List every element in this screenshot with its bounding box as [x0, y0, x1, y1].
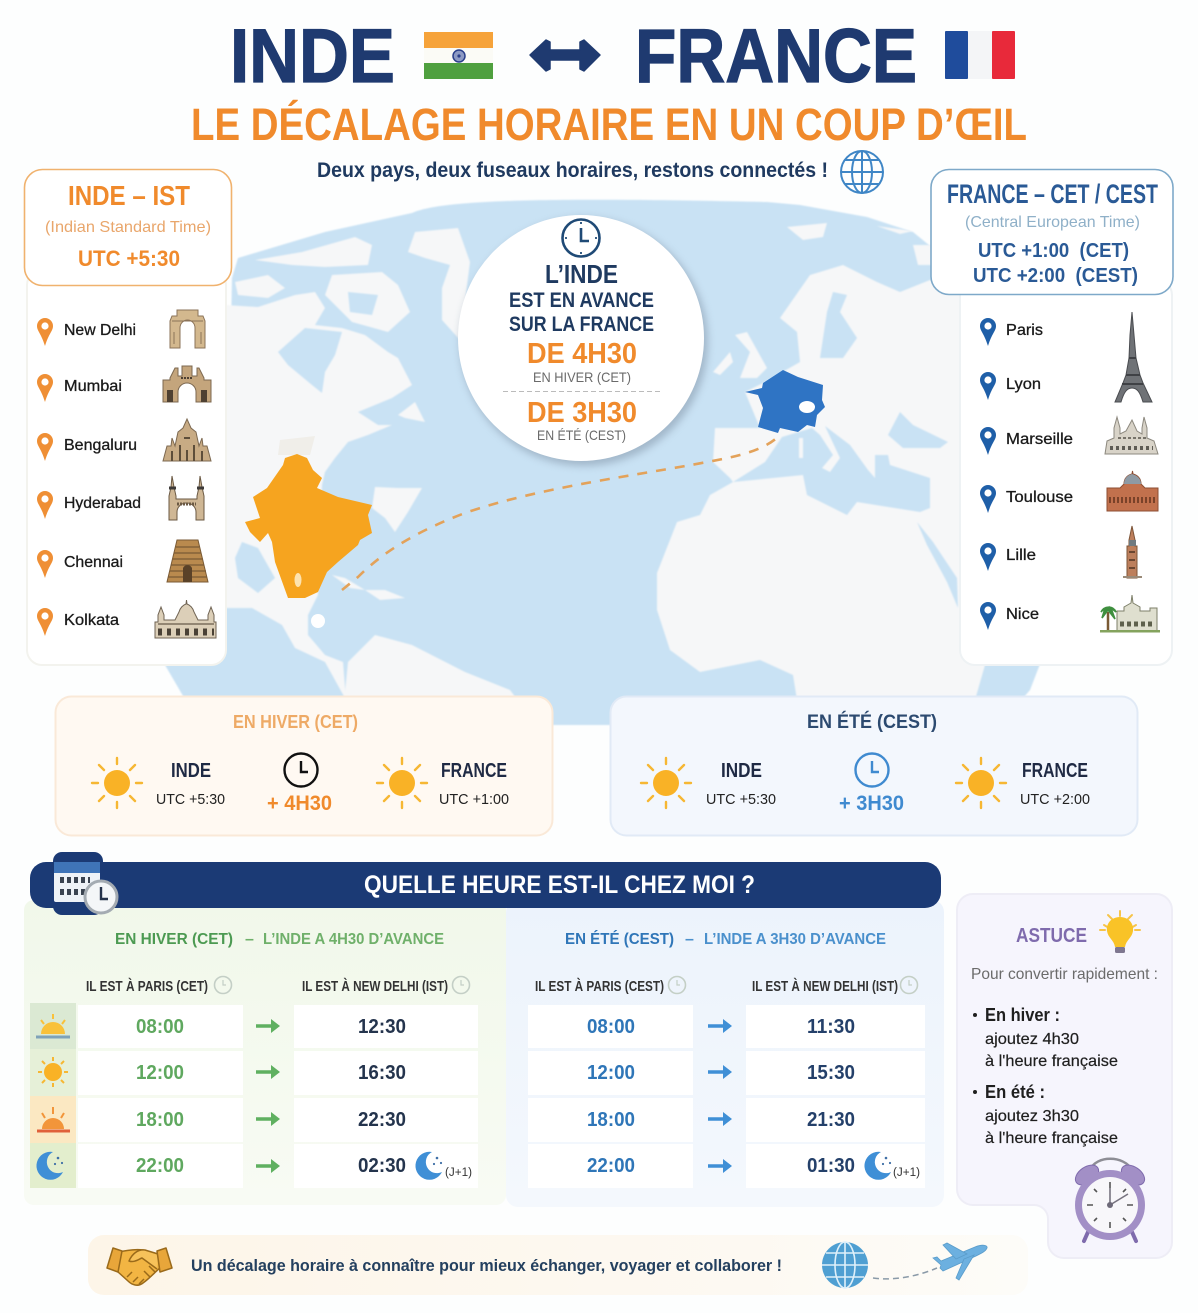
- icon: clock: [284, 754, 318, 786]
- subtitle: LE DÉCALAGE HORAIRE EN UN COUP D’ŒIL: [191, 99, 1027, 150]
- summer heading: EN ÉTÉ (CEST): [565, 929, 674, 948]
- France UTC: FRANCE: [441, 760, 507, 782]
- icon: Chennai temple: [167, 540, 208, 582]
- summer heading: [565, 929, 886, 948]
- icon: Bengaluru palace: [163, 419, 211, 461]
- icon: Eiffel Tower: [1115, 312, 1152, 402]
- India highlighted on map: [245, 454, 372, 598]
- summer heading: –: [685, 931, 694, 948]
- city: Lyon: [980, 372, 1041, 400]
- icon: Victoria Memorial: [155, 600, 216, 638]
- city: Chennai: Chennai: [64, 554, 123, 571]
- panel: summer summary: [610, 696, 1138, 836]
- row: 12:00 to 16:30: 16:30: [358, 1062, 406, 1084]
- summer heading: L’INDE A 3H30 D’AVANCE: [704, 931, 886, 948]
- icon: globe: [841, 151, 883, 193]
- table background: summer: [506, 900, 944, 1207]
- city: Nice: [980, 602, 1039, 630]
- row: 22:00 to 01:30: 22:00: [587, 1155, 635, 1177]
- footer strip: [88, 1235, 1028, 1295]
- city: Lille: [980, 543, 1036, 571]
- row: 12:00 to 15:30: 12:00: [587, 1062, 635, 1084]
- icon: Lille belfry: [1123, 526, 1142, 578]
- city: Paris: [980, 318, 1043, 346]
- France header: (Central European Time): [965, 214, 1140, 231]
- icon: light bulb: [1100, 911, 1140, 953]
- row: 22:00 to 02:30: (J+1): [445, 1167, 472, 1179]
- icon: Charminar: [169, 476, 204, 520]
- city: Mumbai: [37, 374, 122, 402]
- city: Toulouse: [980, 485, 1073, 513]
- banner: QUELLE HEURE EST-IL CHEZ MOI ?: [364, 871, 755, 899]
- row: 08:00 to 12:30: 08:00: [136, 1016, 184, 1038]
- icon: Nice palace with palm: [1100, 595, 1160, 632]
- city: Lille: Lille: [1006, 547, 1036, 564]
- row: 22:00 to 01:30: (J+1): [893, 1167, 920, 1179]
- row: 12:00 to 16:30: [78, 1051, 478, 1095]
- icon: alarm clock: [1072, 1159, 1148, 1241]
- icon: globe: [822, 1242, 868, 1288]
- city: New Delhi: New Delhi: [64, 322, 136, 339]
- tip: winter: En hiver :: [985, 1005, 1060, 1025]
- row: 18:00 to 22:30: [78, 1098, 478, 1142]
- icon: Indian flag: [424, 32, 493, 79]
- city: Bengaluru: Bengaluru: [64, 437, 137, 454]
- dashed flight path: [873, 1268, 937, 1279]
- city: Hyderabad: Hyderabad: [64, 495, 141, 512]
- column head: Paris: IL EST À PARIS (CET): [86, 978, 208, 995]
- winter difference: DE 4H30: [527, 338, 637, 370]
- tip title: ASTUCE: [1016, 925, 1087, 947]
- India UTC: [706, 760, 776, 808]
- panel: winter summary: EN HIVER (CET): [233, 712, 358, 732]
- time-of-day cells: [30, 1003, 76, 1188]
- row: 22:00 to 02:30: 02:30: [358, 1155, 406, 1177]
- icon: clock: [856, 754, 888, 786]
- tip: winter: ajoutez 4h30: [985, 1031, 1079, 1048]
- tip: summer: [973, 1082, 1118, 1147]
- row: 18:00 to 21:30: [528, 1098, 925, 1142]
- panel: winter table: [30, 931, 478, 1188]
- winter heading: [115, 931, 444, 948]
- row: 18:00 to 22:30: 18:00: [136, 1109, 184, 1131]
- icon: sun: [956, 758, 1006, 808]
- India UTC: [156, 760, 225, 808]
- column head: New Delhi: IL EST À NEW DELHI (IST): [752, 978, 898, 995]
- row: 08:00 to 12:30: [78, 1005, 478, 1048]
- France UTC: FRANCE: [1022, 760, 1088, 782]
- white marker: [311, 614, 325, 628]
- row: 18:00 to 21:30: 21:30: [807, 1109, 855, 1131]
- tip: summer: En été :: [985, 1082, 1045, 1102]
- city: Hyderabad: [37, 491, 141, 519]
- row: 22:00 to 01:30: [528, 1144, 925, 1188]
- panel: France cities: [931, 170, 1173, 665]
- Hudson Bay: [278, 328, 342, 393]
- France header: UTC +2:00 (CEST): [973, 265, 1138, 287]
- city: New Delhi: [37, 318, 136, 346]
- title: FRANCE: FRANCE: [635, 14, 917, 99]
- India UTC: UTC +5:30: [156, 791, 225, 808]
- icon: calendar with clock: [53, 852, 117, 915]
- tip: winter: à l'heure française: [985, 1053, 1118, 1070]
- India UTC: INDE: [721, 760, 762, 782]
- icon: Capitole de Toulouse: [1107, 471, 1158, 511]
- tip intro: Pour convertir rapidement :: [971, 966, 1158, 983]
- icon: Gateway of India: [163, 366, 211, 402]
- city: Lyon: Lyon: [1006, 376, 1041, 393]
- panel: tip: [957, 894, 1172, 1258]
- city: Bengaluru: [37, 433, 137, 461]
- row: 18:00 to 21:30: 18:00: [587, 1109, 635, 1131]
- winter heading: L’INDE A 4H30 D’AVANCE: [263, 931, 444, 948]
- India header: UTC +5:30: [78, 246, 180, 271]
- row: 08:00 to 11:30: 11:30: [807, 1016, 855, 1038]
- city: Kolkata: [37, 608, 119, 636]
- title: INDE: INDE: [230, 14, 395, 99]
- banner: [30, 852, 941, 915]
- India header: (Indian Standard Time): [45, 219, 211, 236]
- footer text: Un décalage horaire à connaître pour mieux échanger, voyager et collaborer !: [191, 1256, 782, 1275]
- city: Mumbai: Mumbai: [64, 378, 122, 395]
- panel: India cities: [24, 170, 232, 665]
- row: 12:00 to 16:30: 12:00: [136, 1062, 184, 1084]
- callout text: SUR LA FRANCE: [509, 313, 654, 336]
- row: 22:00 to 02:30: [78, 1144, 478, 1188]
- city: Nice: Nice: [1006, 606, 1039, 623]
- France UTC: [1020, 760, 1090, 808]
- icon: plane: [933, 1243, 987, 1280]
- row: 12:00 to 15:30: [528, 1051, 925, 1095]
- icon: handshake: [107, 1248, 172, 1285]
- city: Kolkata: Kolkata: [64, 612, 119, 629]
- icon: French flag: [945, 31, 1015, 79]
- callout text: EST EN AVANCE: [509, 289, 654, 312]
- city: Marseille: Marseille: [1006, 431, 1073, 448]
- row: 08:00 to 11:30: 08:00: [587, 1016, 635, 1038]
- row: 22:00 to 01:30: 01:30: [807, 1155, 855, 1177]
- city: Paris: Paris: [1006, 322, 1043, 339]
- row: 22:00 to 02:30: 22:00: [136, 1155, 184, 1177]
- France header: [931, 170, 1173, 294]
- tip: winter: [973, 1005, 1118, 1070]
- panel: summer table: [528, 929, 925, 1188]
- France header: UTC +1:00 (CET): [978, 240, 1129, 262]
- panel: summer summary: EN ÉTÉ (CEST): [807, 711, 937, 733]
- France UTC: UTC +2:00: [1020, 791, 1090, 808]
- winter heading: EN HIVER (CET): [115, 931, 233, 948]
- row: 08:00 to 12:30: 12:30: [358, 1016, 406, 1038]
- summer difference: DE 3H30: [527, 397, 637, 429]
- tip: summer: ajoutez 3h30: [985, 1108, 1079, 1125]
- summer difference: EN ÉTÉ (CEST): [537, 427, 626, 443]
- India UTC: INDE: [171, 760, 211, 782]
- summer gap: + 3H30: [839, 792, 904, 815]
- dashed route India to France: [342, 435, 780, 590]
- tip: summer: à l'heure française: [985, 1130, 1118, 1147]
- icon: Notre-Dame de la Garde: [1105, 417, 1158, 454]
- table background: winter: [24, 900, 506, 1205]
- icon: double arrow: [530, 40, 600, 71]
- France UTC: UTC +1:00: [439, 791, 509, 808]
- India header: [24, 170, 232, 286]
- row: 08:00 to 11:30: [528, 1005, 925, 1048]
- icon: clock: [562, 220, 600, 256]
- lake spot in India: [294, 573, 302, 587]
- winter gap: + 4H30: [267, 792, 332, 815]
- summer difference: [527, 397, 637, 443]
- land tint above India: [278, 436, 315, 455]
- column head: Paris: IL EST À PARIS (CEST): [535, 978, 664, 995]
- icon: sun: [641, 758, 691, 808]
- winter difference: EN HIVER (CET): [533, 369, 631, 385]
- city: Chennai: [37, 550, 123, 578]
- icon: India Gate: [170, 310, 205, 348]
- tagline: Deux pays, deux fuseaux horaires, restons connectés !: [317, 159, 828, 182]
- winter difference: [527, 338, 637, 385]
- row: 12:00 to 15:30: 15:30: [807, 1062, 855, 1084]
- India header: INDE – IST: [68, 180, 190, 211]
- column head: New Delhi: IL EST À NEW DELHI (IST): [302, 978, 448, 995]
- city: Toulouse: Toulouse: [1006, 489, 1073, 506]
- row: 18:00 to 22:30: 22:30: [358, 1109, 406, 1131]
- callout text: [509, 259, 654, 336]
- icon: sun: [377, 758, 427, 808]
- France UTC: [439, 760, 509, 808]
- city: Marseille: [980, 427, 1073, 455]
- France highlighted on map: [745, 370, 825, 433]
- callout text: L’INDE: [545, 259, 618, 289]
- India UTC: UTC +5:30: [706, 791, 776, 808]
- world map: [165, 200, 1040, 735]
- icon: sun: [92, 758, 142, 808]
- panel: winter summary: [56, 696, 552, 836]
- winter heading: –: [245, 931, 254, 948]
- center circle callout: [458, 215, 708, 466]
